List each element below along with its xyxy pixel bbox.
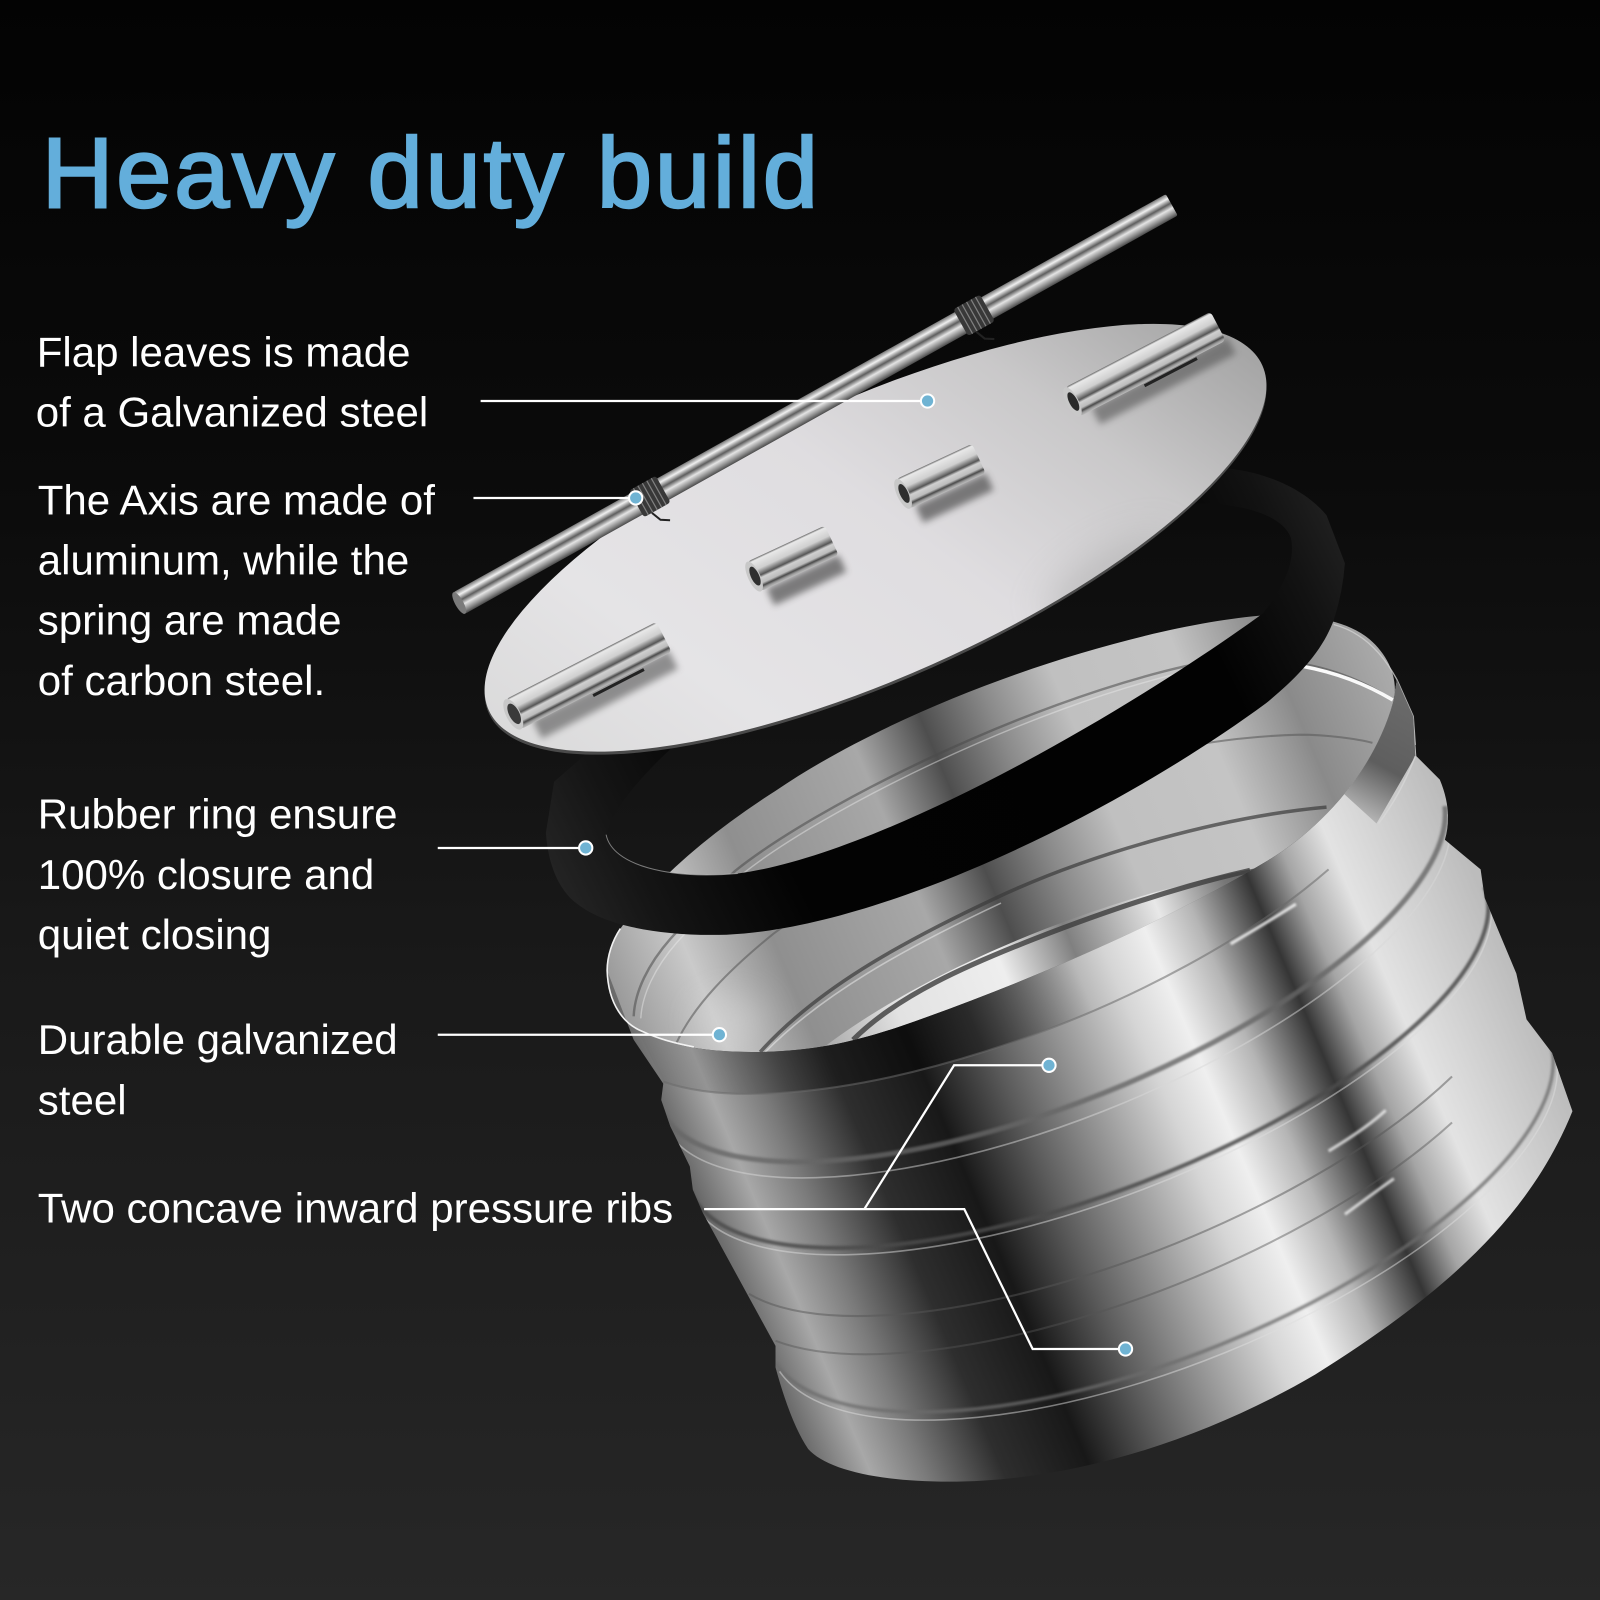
hinge tube 1 bbox=[499, 622, 680, 748]
hinge tube 2 bbox=[742, 526, 846, 611]
callout: flap leaves: Flap leaves is made bbox=[37, 328, 411, 375]
callout: axis and spring: aluminum, while the bbox=[38, 536, 409, 583]
callout: flap leaves bbox=[36, 328, 934, 436]
galvanized steel drum bbox=[571, 592, 1572, 1482]
callout: pressure ribs bbox=[38, 1059, 1132, 1356]
axis rod bbox=[453, 194, 1178, 614]
rubber ring bbox=[546, 468, 1345, 935]
callout: rubber ring: Rubber ring ensure bbox=[38, 791, 398, 838]
callout: rubber ring: 100% closure and bbox=[38, 851, 374, 898]
carbon steel spring 1 bbox=[629, 476, 678, 531]
outer lip bbox=[1343, 680, 1415, 823]
drum rim highlight bbox=[607, 929, 694, 1047]
pressure ribs bbox=[607, 680, 1557, 1420]
callout: rubber ring: quiet closing bbox=[38, 911, 271, 958]
callout: axis and spring: spring are made bbox=[38, 597, 341, 644]
drum outer body bbox=[607, 680, 1572, 1482]
aluminum axis with springs bbox=[448, 191, 1187, 632]
carbon steel spring 2 bbox=[953, 294, 1002, 350]
callout: axis and spring: of carbon steel. bbox=[38, 657, 325, 704]
callout: flap leaves: of a Galvanized steel bbox=[36, 389, 428, 436]
callout: galvanized steel: steel bbox=[38, 1076, 127, 1123]
drum interior bbox=[608, 616, 1395, 1052]
hinge tube 3 bbox=[891, 444, 994, 528]
top rim back edge bbox=[1334, 624, 1415, 745]
callout: rubber ring bbox=[38, 791, 592, 958]
callout: axis and spring: The Axis are made of bbox=[38, 476, 435, 523]
title: Heavy duty build bbox=[42, 117, 821, 228]
callout: pressure ribs: Two concave inward pressure ribs bbox=[38, 1184, 673, 1231]
callout: galvanized steel bbox=[38, 1016, 726, 1123]
flap leaf plate bbox=[484, 313, 1266, 755]
callout: axis and spring bbox=[38, 476, 642, 704]
hinge tube 4 bbox=[1059, 310, 1236, 434]
callout: galvanized steel: Durable galvanized bbox=[38, 1016, 398, 1063]
